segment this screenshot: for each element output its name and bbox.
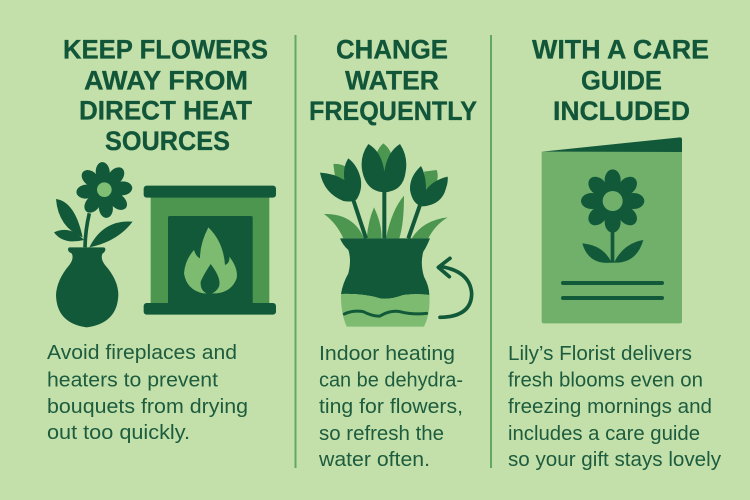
icon: care guide card	[542, 137, 682, 323]
text: indoor heating	[318, 343, 463, 471]
text: avoid fireplaces: Avoid fireplaces and	[47, 342, 237, 364]
text: lily's florist: includes a care guide	[508, 423, 700, 445]
text: indoor heating: Indoor heating	[319, 343, 455, 365]
heading: keep flowers away: AWAY FROM	[84, 66, 248, 96]
heading: keep flowers away: KEEP FLOWERS	[63, 34, 268, 64]
text: lily's florist	[508, 343, 721, 471]
text: avoid fireplaces: bouquets from drying	[47, 396, 248, 418]
heading: with a care guide: GUIDE	[581, 66, 662, 96]
text: lily's florist: freezing mornings and	[508, 396, 712, 418]
panel: care guide	[508, 34, 721, 471]
heading: with a care guide: WITH A CARE	[532, 34, 709, 64]
heading: with a care guide	[532, 34, 709, 126]
text: avoid fireplaces	[47, 342, 248, 444]
heading: keep flowers away: SOURCES	[105, 126, 230, 156]
text: avoid fireplaces: out too quickly.	[47, 422, 190, 444]
text: lily's florist: Lily’s Florist delivers	[508, 343, 692, 365]
heading: with a care guide: INCLUDED	[553, 96, 690, 126]
text: lily's florist: so your gift stays lovely	[508, 449, 721, 471]
text: indoor heating: water often.	[318, 449, 430, 471]
heading: change water frequently: CHANGE	[336, 34, 448, 64]
panel: keep flowers away from heat	[47, 34, 276, 444]
icon: tulips in vase	[320, 143, 472, 327]
heading: change water frequently: WATER	[345, 66, 439, 96]
text: indoor heating: so refresh the	[319, 423, 444, 445]
heading: change water frequently	[309, 34, 477, 126]
heading: change water frequently: FREQUENTLY	[309, 96, 477, 126]
text: indoor heating: can be dehydra-	[319, 370, 463, 392]
text: indoor heating: ting for flowers,	[319, 396, 463, 418]
text: avoid fireplaces: heaters to prevent	[47, 370, 218, 392]
heading: keep flowers away	[63, 34, 268, 156]
panel: change water	[309, 34, 477, 471]
text: lily's florist: fresh blooms even on	[508, 370, 703, 392]
heading: keep flowers away: DIRECT HEAT	[79, 96, 252, 126]
icon: flower in vase	[54, 161, 133, 327]
icon: fireplace	[144, 186, 276, 315]
